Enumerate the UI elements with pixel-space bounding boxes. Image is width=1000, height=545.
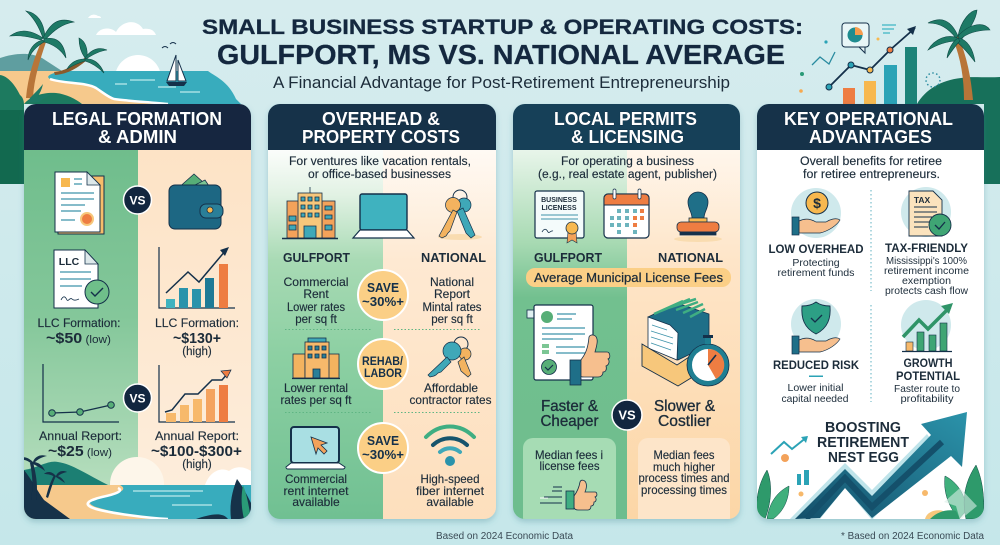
text: tax friendly: exemption: [902, 276, 951, 287]
annual report high cost: ~$100-$300+: [151, 443, 242, 460]
row: internet national: available: [426, 495, 474, 509]
title: [202, 16, 803, 70]
badge: save 30 percent: SAVE: [367, 280, 399, 295]
text: slower and costlier: Slower &: [654, 398, 715, 415]
row: internet gulfport: [284, 472, 349, 509]
callout: median fees national: [638, 438, 730, 519]
vs badge: [124, 384, 152, 412]
row: commercial rent gulfport: Rent: [303, 287, 329, 301]
badge: rehab labor: REHAB/: [362, 354, 404, 368]
panel heading: advantages: ADVANTAGES: [809, 127, 932, 147]
panel heading: advantages: KEY OPERATIONAL: [784, 109, 953, 129]
callout: median fees national: processing times: [641, 483, 727, 497]
footnote right: * Based on 2024 Economic Data: [841, 531, 984, 542]
text: boosting retirement nest egg: RETIREMENT: [817, 435, 909, 451]
text: reduced risk: capital needed: [782, 393, 849, 405]
icon: business license: [535, 191, 584, 243]
row: internet gulfport: available: [292, 495, 340, 509]
text: low overhead: Protecting: [792, 257, 840, 269]
callout: median fees gulfport: Median fees i: [535, 448, 603, 462]
text: faster and cheaper: [540, 398, 599, 430]
vs badge: VS: [129, 194, 146, 208]
text: tax friendly: [884, 241, 969, 297]
row: commercial rent national: Mintal rates: [422, 302, 482, 314]
icon: keys: [438, 190, 482, 240]
callout: median fees national: Median fees: [654, 448, 714, 462]
icon: LLC document: [54, 250, 109, 308]
text: reduced risk: Lower initial: [788, 382, 844, 394]
row: commercial rent gulfport: per sq ft: [295, 314, 338, 326]
intro text: permits: (e.g., real estate agent, publisher): [538, 169, 717, 181]
icon: business license: BUSINESS: [541, 197, 577, 204]
intro text: overhead: [289, 156, 471, 181]
panel: legal formation and admin: [17, 104, 251, 519]
vs badge: VS: [129, 392, 146, 406]
icon: tax document: [901, 187, 951, 237]
text: tax friendly: retirement income: [884, 266, 969, 277]
panel: local permits and licensing: [513, 104, 740, 519]
intro text: overhead: or office-based businesses: [308, 169, 451, 181]
panel heading: permits: LOCAL PERMITS: [554, 109, 697, 129]
illustration: beach scene top left: [0, 11, 241, 184]
icon: laptop with cursor: [286, 427, 345, 469]
icon: LLC document: LLC: [59, 256, 80, 268]
text: boosting retirement nest egg: NEST EGG: [828, 450, 899, 466]
badge: rehab labor: [358, 339, 408, 389]
icon: calendar: [604, 189, 649, 238]
chart: annual report rising: [159, 365, 235, 422]
icon: office building: [282, 187, 338, 238]
annual report low cost: [39, 429, 122, 460]
vs badge: [124, 186, 152, 214]
panel: key operational advantages: [757, 104, 984, 519]
icon: small building: [292, 338, 340, 378]
column labels: overhead: GULFPORT: [283, 250, 350, 265]
row: commercial rent national: Report: [434, 287, 471, 301]
row: internet national: fiber internet: [416, 484, 485, 498]
row: rental rates gulfport: rates per sq ft: [280, 393, 352, 407]
text: boosting retirement nest egg: [817, 420, 909, 466]
icon: approved form with thumbs up: [527, 305, 610, 385]
annual report high cost: [151, 429, 242, 471]
row: internet gulfport: rent internet: [284, 484, 349, 498]
row: contractor rates national: contractor rates: [410, 393, 492, 407]
panel heading: legal formation: LEGAL FORMATION: [52, 109, 222, 129]
text: growth potential: GROWTH: [904, 356, 952, 370]
panel heading: overhead: PROPERTY COSTS: [302, 127, 460, 147]
text: faster and cheaper: Cheaper: [540, 413, 599, 430]
row: commercial rent gulfport: Lower rates: [287, 302, 345, 314]
badge: save 30 percent: ~30%+: [362, 447, 404, 462]
icon: wallet: [169, 174, 223, 229]
row: contractor rates national: Affordable: [424, 381, 478, 395]
LLC formation high cost: ~$130+: [173, 330, 221, 347]
annual report low cost: Annual Report:: [39, 429, 122, 443]
column labels: permits: NATIONAL: [658, 250, 723, 265]
badge: rehab labor: LABOR: [364, 366, 402, 380]
badge: save 30 percent: SAVE: [367, 433, 399, 448]
text: boosting retirement nest egg: BOOSTING: [825, 420, 901, 436]
intro text: advantages: for retiree entrepreneurs.: [803, 169, 940, 181]
chart: LLC formation rising costs: [159, 247, 235, 308]
text: reduced risk: [773, 358, 859, 405]
column labels: permits: [534, 250, 723, 265]
icon: business license: LICENESS: [541, 205, 577, 212]
column labels: permits: GULFPORT: [534, 250, 602, 265]
row: rental rates gulfport: Lower rental: [284, 381, 348, 395]
text: tax friendly: protects cash flow: [885, 286, 969, 297]
panel heading: permits: [554, 109, 697, 147]
text: tax friendly: Mississippi's 100%: [886, 256, 967, 267]
annual report high cost: Annual Report:: [155, 429, 239, 443]
footnote center: Based on 2024 Economic Data: [436, 531, 573, 542]
row: commercial rent national: [422, 275, 482, 326]
annual report low cost: ~$25 (low): [48, 443, 112, 460]
panel heading: legal formation: [52, 109, 222, 147]
badge: save 30 percent: ~30%+: [362, 294, 404, 309]
graphic: boosting retirement arrow: [756, 412, 984, 520]
text: growth potential: profitability: [900, 393, 954, 405]
LLC formation high cost: [155, 316, 239, 358]
panel heading: overhead: [302, 109, 460, 147]
icon: laptop: [353, 194, 414, 238]
LLC formation high cost: LLC Formation:: [155, 316, 239, 330]
text: low overhead: [768, 242, 864, 279]
icon: stamp: [674, 192, 722, 242]
icon: coin in hand: [791, 188, 841, 238]
panel heading: advantages: [784, 109, 953, 147]
row: commercial rent gulfport: [284, 275, 348, 326]
intro text: advantages: Overall benefits for retiree: [800, 156, 942, 168]
illustration: growth chart top right: [799, 10, 1000, 184]
vs badge: [612, 400, 642, 430]
callout: median fees national: much higher: [653, 460, 715, 474]
title: GULFPORT, MS VS. NATIONAL AVERAGE: [217, 39, 785, 70]
row: rental rates gulfport: [280, 381, 352, 407]
panel heading: legal formation: & ADMIN: [98, 127, 177, 147]
icon: paper files with stopwatch: [642, 299, 729, 386]
icon: shield in hand: [791, 299, 841, 354]
icon: growth chart: [901, 300, 953, 352]
text: growth potential: POTENTIAL: [896, 369, 960, 383]
vs badge: VS: [618, 408, 636, 422]
text: reduced risk: REDUCED RISK: [773, 358, 859, 372]
annual report high cost: (high): [182, 459, 212, 471]
row: commercial rent national: per sq ft: [431, 314, 474, 326]
callout: median fees gulfport: license fees: [540, 459, 600, 473]
LLC formation low cost: ~$50 (low): [46, 330, 111, 347]
text: growth potential: [894, 356, 960, 405]
text: faster and cheaper: Faster &: [541, 398, 598, 415]
text: low overhead: LOW OVERHEAD: [768, 242, 864, 256]
row: commercial rent gulfport: Commercial: [284, 275, 348, 289]
chart: annual report flat: [43, 364, 119, 422]
text: slower and costlier: Costlier: [658, 413, 712, 430]
badge: save 30 percent: [358, 423, 408, 473]
pill: average municipal license fees: Average Municipal License Fees: [534, 270, 723, 285]
LLC formation low cost: LLC Formation:: [38, 316, 120, 330]
panel scene: beach at bottom: [17, 455, 251, 519]
icon: contractor keys: [428, 337, 471, 377]
intro text: permits: [538, 156, 717, 181]
panel heading: overhead: OVERHEAD &: [322, 109, 440, 129]
badge: save 30 percent: [358, 270, 408, 320]
column labels: overhead: NATIONAL: [421, 250, 486, 265]
icon: tax document: TAX: [914, 195, 931, 205]
panel heading: permits: & LICENSING: [571, 127, 684, 147]
text: growth potential: Faster route to: [894, 383, 960, 395]
text: low overhead: retirement funds: [778, 267, 854, 279]
intro text: advantages: [800, 156, 942, 181]
intro text: permits: For operating a business: [561, 156, 694, 168]
LLC formation high cost: (high): [182, 346, 212, 358]
callout: median fees national: process times and: [638, 471, 730, 485]
intro text: overhead: For ventures like vacation rentals,: [289, 156, 471, 168]
text: slower and costlier: [654, 398, 715, 430]
row: internet national: [416, 472, 485, 509]
icon: wifi: [426, 426, 474, 466]
row: internet national: High-speed: [420, 472, 480, 486]
row: commercial rent national: National: [430, 275, 474, 289]
column labels: overhead: [283, 250, 486, 265]
row: contractor rates national: [410, 381, 492, 407]
icon: document: [55, 172, 104, 234]
text: tax friendly: TAX-FRIENDLY: [885, 241, 968, 255]
icon: coin in hand: $: [813, 195, 821, 211]
subtitle: A Financial Advantage for Post-Retirement Entrepreneurship: [273, 73, 730, 92]
row: internet gulfport: Commercial: [285, 472, 347, 486]
LLC formation low cost: [38, 316, 120, 347]
callout: median fees gulfport: [523, 438, 616, 519]
panel: overhead and property costs: [268, 104, 496, 519]
title: SMALL BUSINESS STARTUP & OPERATING COSTS:: [202, 16, 803, 39]
